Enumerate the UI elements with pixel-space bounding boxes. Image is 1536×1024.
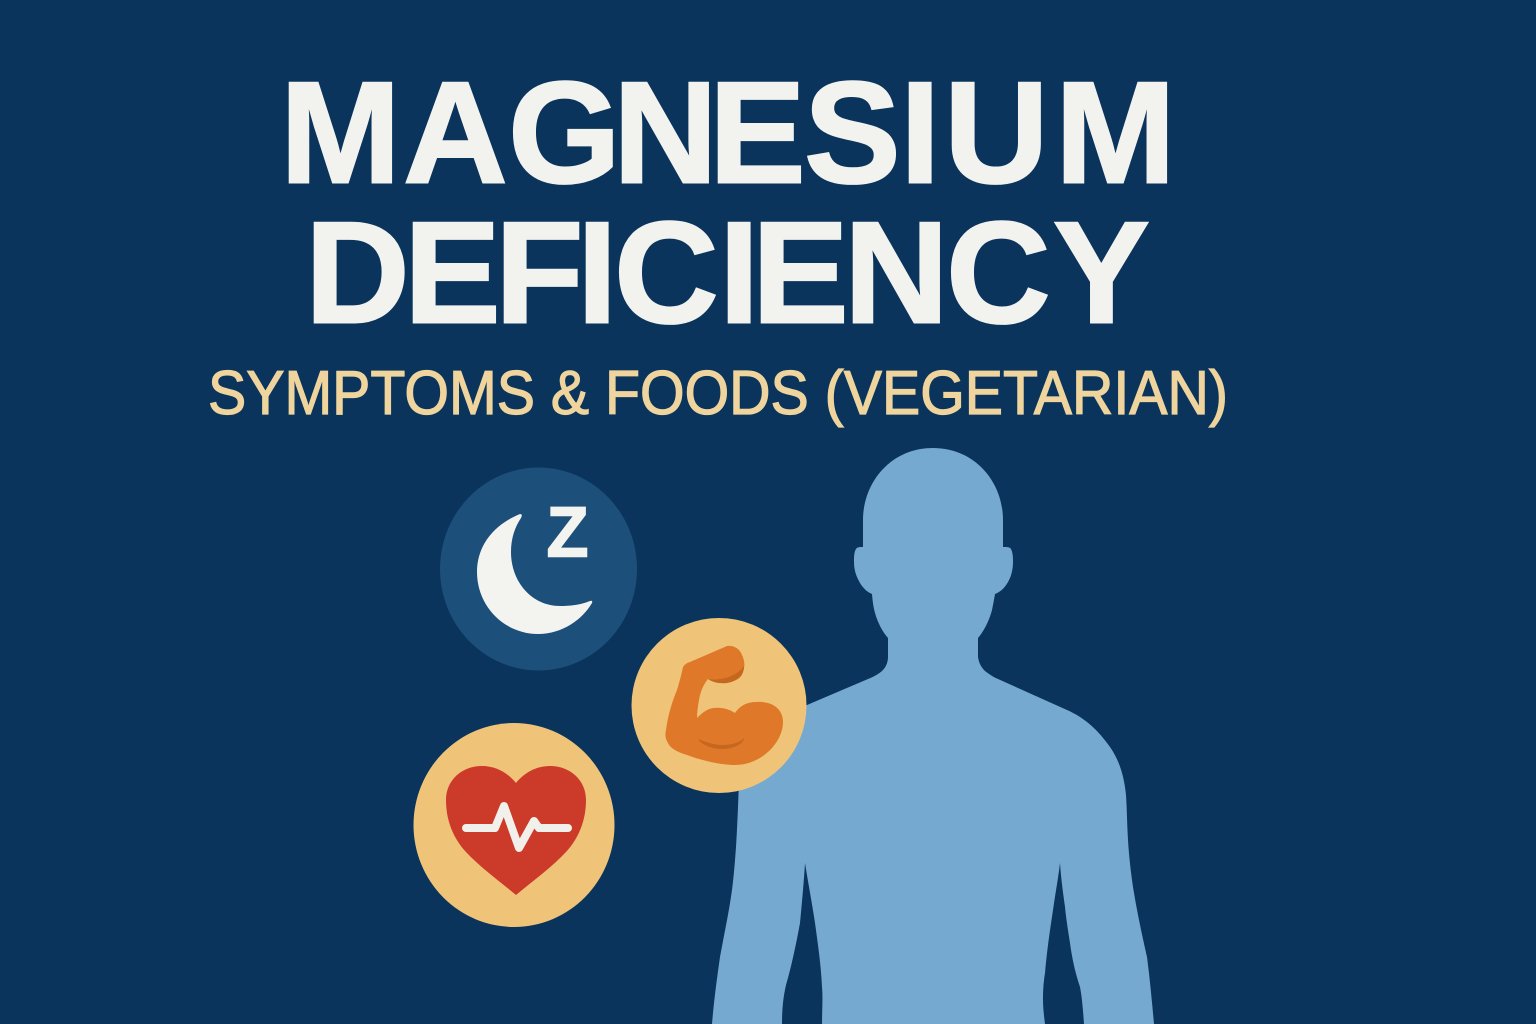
fist shadow: [708, 666, 744, 683]
icon: sleep moon: [440, 468, 637, 670]
subtitle: SYMPTOMS & FOODS (VEGETARIAN): [208, 359, 1228, 428]
letter z: Z: [546, 494, 588, 572]
title: [280, 52, 1176, 354]
title: MAGNESIUM: [280, 52, 1176, 214]
icon: heart with pulse: [414, 723, 614, 927]
bicep crease: [698, 738, 744, 749]
title: DEFICIENCY: [305, 192, 1150, 354]
moon crescent: [477, 514, 592, 634]
arm shape: [665, 646, 783, 765]
pulse line: [466, 806, 568, 848]
human silhouette: [712, 448, 1154, 1024]
icon: flexed muscle: [632, 618, 806, 793]
heart: [446, 766, 586, 895]
